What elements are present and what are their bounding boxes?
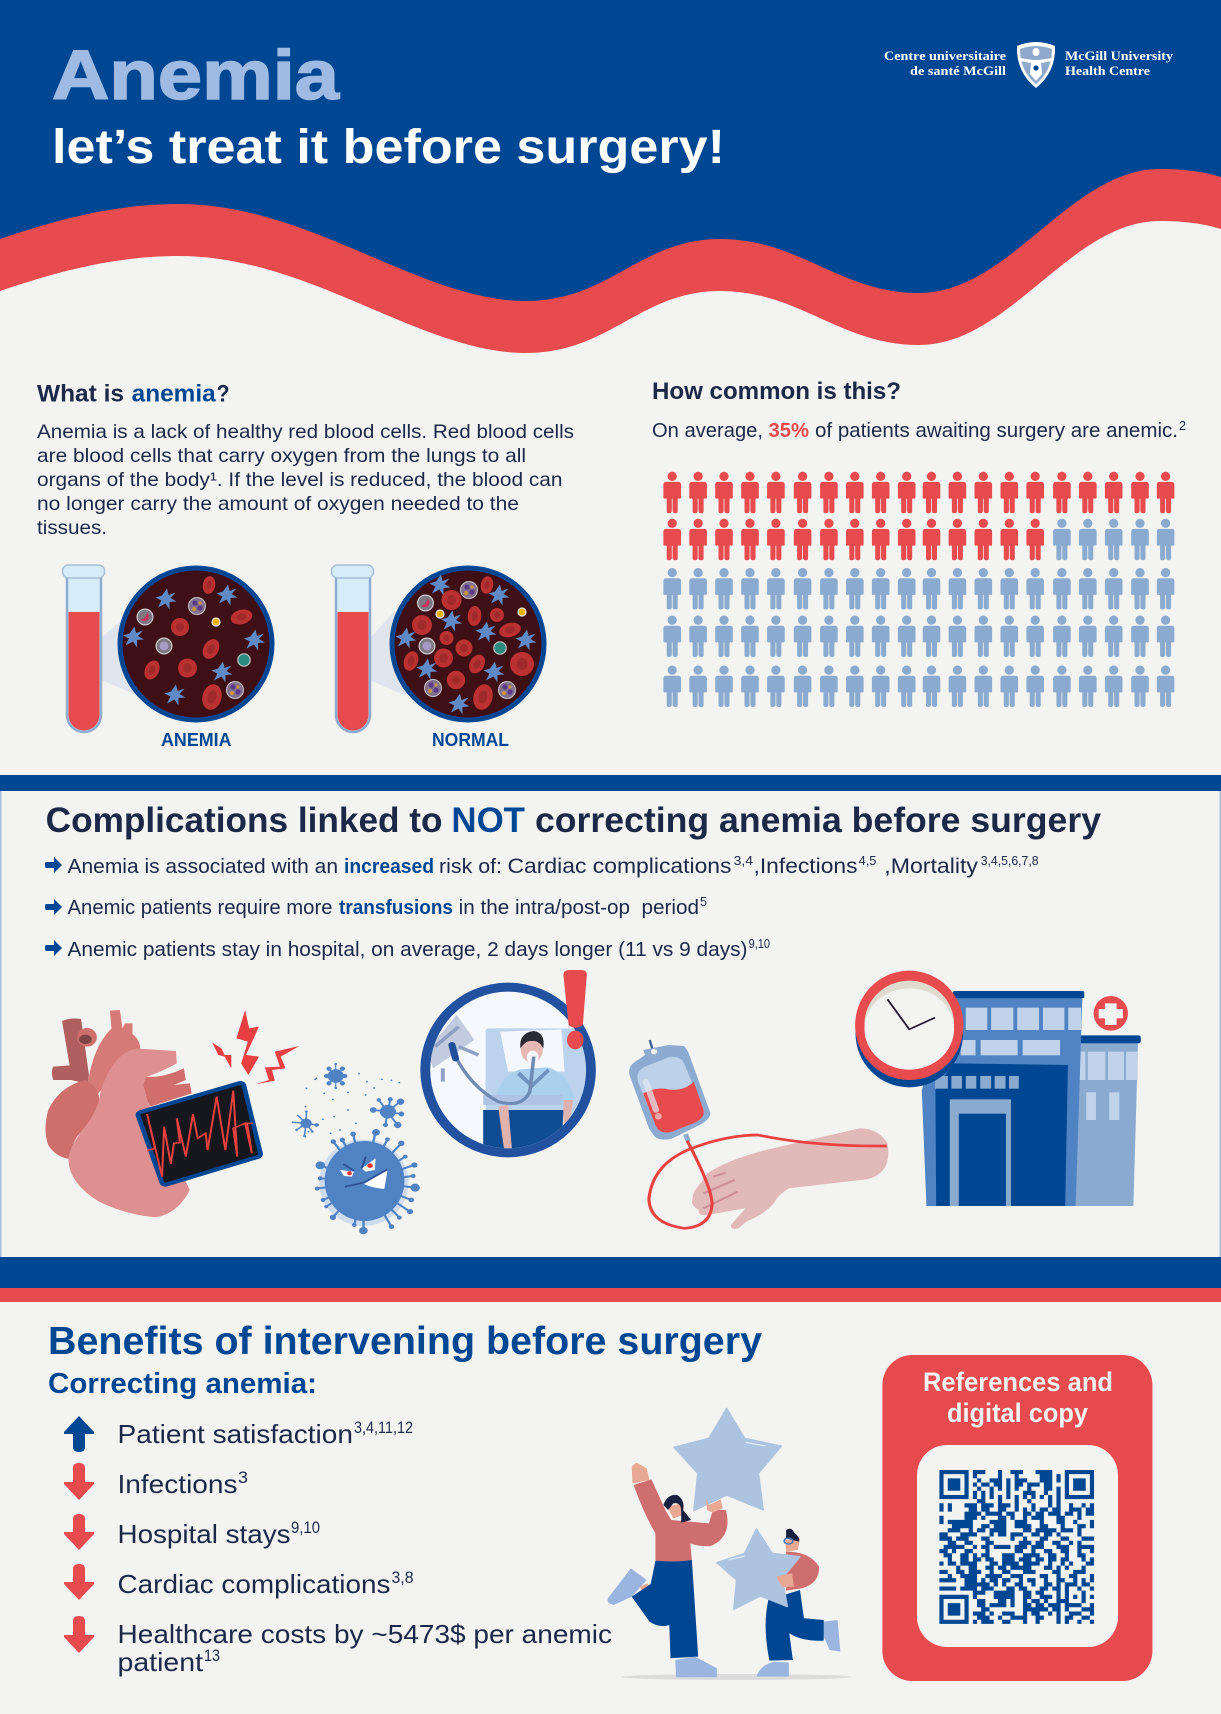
card title xyxy=(923,1367,1113,1428)
illustration: blood transfusion xyxy=(629,1040,888,1229)
illustration: viruses xyxy=(293,1063,420,1234)
logo: Centre universitaire xyxy=(884,48,1006,63)
benefit: hospital stays down: Hospital stays xyxy=(118,1519,290,1549)
list item: transfusions: transfusions xyxy=(339,897,453,919)
title: Anemia xyxy=(52,36,340,114)
benefit: cardiac complications down: 3,8 xyxy=(392,1569,414,1587)
list item: transfusions: 5 xyxy=(700,895,707,909)
card title: digital copy xyxy=(947,1398,1088,1428)
icon: down arrow xyxy=(64,1514,94,1550)
label: anemia: ANEMIA xyxy=(161,730,232,750)
panel: what is anemia xyxy=(37,380,574,750)
list item: longer stay: 9,10 xyxy=(749,937,770,951)
benefit: patient satisfaction up: 3,4,11,12 xyxy=(354,1419,413,1437)
pictogram: 35 of 100 patients xyxy=(663,472,1174,707)
blood bag xyxy=(629,1040,711,1142)
icon: down arrow xyxy=(64,1616,94,1653)
references card xyxy=(882,1355,1152,1681)
benefit: infections down xyxy=(64,1463,248,1500)
big star xyxy=(674,1408,781,1511)
illustration: ventilated patient xyxy=(420,970,596,1157)
icon: arrow xyxy=(45,857,62,873)
blue wave xyxy=(0,0,1221,301)
panel: how common is this xyxy=(652,378,1186,707)
list item: increased risk xyxy=(45,854,1039,878)
icon: medical cross xyxy=(1094,996,1128,1031)
icon: up arrow xyxy=(64,1416,94,1452)
benefit: hospital stays down xyxy=(64,1514,320,1550)
card title: References and xyxy=(923,1367,1113,1397)
definition text: tissues. xyxy=(37,517,107,539)
list item: transfusions: in the intra/post-op period xyxy=(459,897,699,919)
benefit: healthcare costs down: Healthcare costs by ~5473$ per anemic xyxy=(118,1619,612,1649)
heading: correcting anemia before surgery xyxy=(535,801,1102,840)
subheading: Correcting anemia: xyxy=(48,1368,317,1400)
small star xyxy=(717,1529,800,1609)
blood cells circle xyxy=(392,568,544,720)
section borders xyxy=(0,775,1221,1302)
benefit: patient satisfaction up xyxy=(64,1416,413,1452)
heading xyxy=(46,801,1102,840)
prevalence statement xyxy=(652,419,1186,442)
blood cells circle xyxy=(120,568,272,720)
logo: Health Centre xyxy=(1065,63,1150,78)
logo: de santé McGill xyxy=(910,63,1006,78)
icon: down arrow xyxy=(64,1564,94,1600)
arm xyxy=(692,1128,888,1229)
benefit: cardiac complications down xyxy=(64,1564,414,1600)
illustration: anemia tube and blood xyxy=(62,565,272,750)
bed xyxy=(486,1028,588,1115)
icon: down arrow xyxy=(64,1463,94,1500)
panel: complications xyxy=(0,775,1221,1302)
heading: How common is this? xyxy=(652,378,901,405)
small virus xyxy=(324,1063,347,1089)
icon: shield xyxy=(1017,42,1055,88)
definition text: organs of the body¹. If the level is reduced, the blood can xyxy=(37,469,562,491)
prevalence statement: On average, xyxy=(652,420,763,442)
illustration: hospital with clock xyxy=(855,971,1141,1206)
list item: longer stay: Anemic patients stay in hospital, on average, 2 days longer (11 vs 9 days) xyxy=(68,939,748,961)
header banner xyxy=(0,0,1221,353)
logo xyxy=(884,42,1174,88)
QR code xyxy=(939,1472,1094,1622)
list item: increased risk: ,Infections xyxy=(754,854,858,878)
benefit: healthcare costs down: 13 xyxy=(204,1647,220,1665)
list item: increased risk: Cardiac complications xyxy=(508,854,732,878)
heading: Complications linked to xyxy=(46,801,442,840)
definition text xyxy=(37,421,574,539)
benefit: cardiac complications down: Cardiac complications xyxy=(118,1569,390,1599)
benefit: infections down: 3 xyxy=(238,1469,248,1487)
panel: benefits xyxy=(48,1320,1152,1681)
list item: increased risk: ,Mortality xyxy=(884,854,978,878)
definition text: Anemia is a lack of healthy red blood cells. Red blood cells xyxy=(37,421,574,443)
prevalence statement: of patients awaiting surgery are anemic. xyxy=(815,420,1178,442)
heading: Benefits of intervening before surgery xyxy=(48,1320,762,1363)
list item: increased risk: 3,4 xyxy=(734,854,753,868)
icon: exclamation mark xyxy=(563,970,587,1049)
oxygen tube xyxy=(455,1055,534,1104)
benefit: patient satisfaction up: Patient satisfaction xyxy=(118,1419,353,1449)
list item: increased risk: risk of: xyxy=(439,856,502,878)
label: normal: NORMAL xyxy=(432,730,509,750)
heading xyxy=(37,380,230,408)
red wave xyxy=(0,0,1221,353)
benefit: hospital stays down: 9,10 xyxy=(291,1519,320,1537)
icon: lightning bolts xyxy=(212,1010,299,1084)
icon: clock xyxy=(855,971,963,1087)
benefit: healthcare costs down xyxy=(64,1616,612,1677)
prevalence statement: 2 xyxy=(1179,419,1186,433)
blood line xyxy=(649,1135,887,1228)
prevalence statement: 35% xyxy=(768,420,809,442)
heading: NOT xyxy=(451,801,525,840)
heading: What is xyxy=(37,380,124,408)
list item: increased risk: 3,4,5,6,7,8 xyxy=(981,854,1039,868)
woman xyxy=(608,1463,728,1677)
icon: arrow xyxy=(45,899,62,915)
icon: arrow xyxy=(45,940,62,956)
heading: anemia xyxy=(132,380,216,408)
large angry virus xyxy=(315,1129,420,1234)
list item: transfusions: Anemic patients require more xyxy=(68,897,332,919)
illustration: normal tube and blood xyxy=(332,565,544,750)
patient xyxy=(497,1067,574,1104)
illustration: people with stars xyxy=(608,1408,852,1680)
illustration: heart with ECG xyxy=(45,1010,299,1217)
benefit: healthcare costs down: patient xyxy=(118,1647,204,1677)
logo: McGill University xyxy=(1065,48,1174,63)
ventilator xyxy=(427,1015,474,1068)
benefit: infections down: Infections xyxy=(118,1469,238,1499)
definition text: are blood cells that carry oxygen from the lungs to all xyxy=(37,445,526,467)
man xyxy=(717,1529,840,1677)
small virus xyxy=(370,1097,404,1128)
small virus xyxy=(293,1111,319,1137)
list item: increased risk: 4,5 xyxy=(859,854,876,868)
subtitle: let’s treat it before surgery! xyxy=(52,121,725,174)
list item: increased risk: Anemia is associated with an xyxy=(68,856,338,878)
test tube xyxy=(332,565,374,732)
list item: increased risk: increased xyxy=(344,856,434,878)
heading: ? xyxy=(216,380,230,408)
list item: transfusions xyxy=(45,895,707,919)
ECG monitor xyxy=(142,1086,257,1182)
definition text: no longer carry the amount of oxygen needed to the xyxy=(37,493,519,515)
test tube xyxy=(62,565,104,732)
